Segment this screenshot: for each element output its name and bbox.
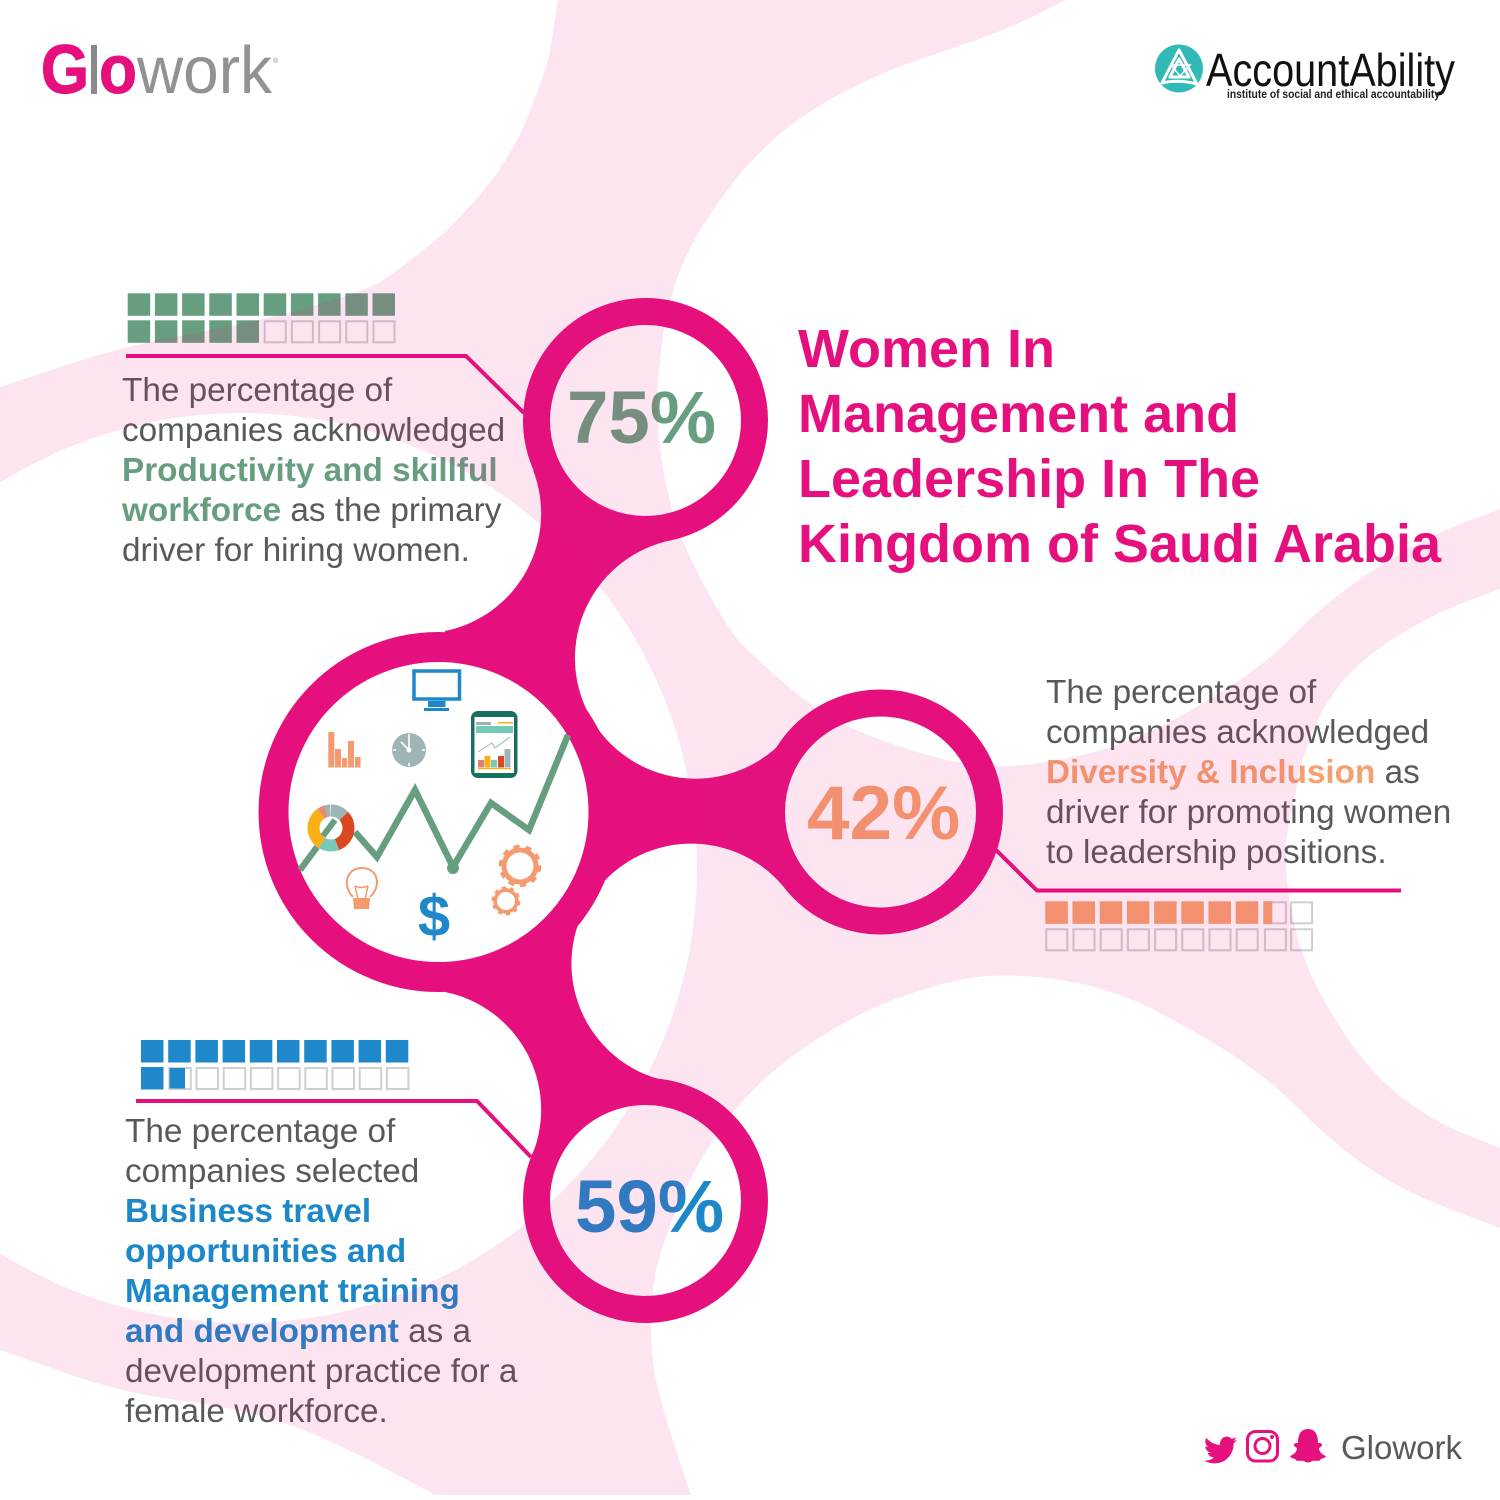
percentage: 42%: 42%: [807, 771, 960, 856]
icon: twitter: [1204, 1437, 1237, 1463]
text block: 42% description: driver for promoting women: [1046, 794, 1451, 831]
title: Leadership In The: [798, 449, 1260, 509]
percentage: 75%: 75%: [567, 376, 716, 459]
icon: dollar sign: $: [418, 884, 450, 949]
text block: 75% description: as the primary: [281, 492, 502, 529]
icon: donut chart: [314, 810, 348, 846]
ring: 59% circle: [536, 1092, 754, 1310]
waffle: 75% (15 of 20 squares): [128, 293, 395, 343]
title: Women In: [798, 319, 1055, 379]
text block: 59% description: companies selected: [125, 1153, 419, 1190]
text block: 75% description: workforce: [121, 492, 281, 529]
text block: 59% description: and development: [125, 1313, 399, 1350]
ring: 75% circle: [536, 312, 754, 530]
icon: gears: [493, 846, 540, 914]
text block: 42% description: as: [1375, 754, 1420, 791]
icon: instagram: [1248, 1432, 1278, 1461]
logo: AccountAbility: AccountAbility: [1206, 44, 1455, 96]
logo: AccountAbility: institute of social and ethical accountability: [1227, 87, 1440, 101]
text block: 75% description: companies acknowledged: [122, 412, 505, 449]
text block: 42% description: companies acknowledged: [1046, 714, 1429, 751]
icon: snapchat: [1290, 1429, 1326, 1462]
callout leader: 59%: [136, 1101, 531, 1157]
waffle: 59% (11.8 of 20 squares): [141, 1040, 408, 1090]
text block: 59% description: as a: [399, 1313, 471, 1350]
text block: 59% description: Business travel: [125, 1193, 371, 1230]
logo: Glowork: G: [41, 31, 89, 108]
logo: Glowork: ®: [273, 57, 279, 65]
footer social row: [1204, 1429, 1463, 1466]
central hub circle: [274, 647, 604, 977]
callout leader: 42%: [996, 850, 1401, 890]
line chart: [300, 735, 568, 874]
magenta connector hub: [445, 470, 783, 1153]
text block: 75% description: Productivity and skillful: [122, 452, 498, 489]
text block: 75% description: The percentage of: [122, 372, 393, 409]
footer handle: Glowork: [1341, 1429, 1463, 1466]
icon: light bulb: [347, 868, 377, 909]
text block: 59% description: development practice for a: [125, 1353, 518, 1390]
text block: 59% description: The percentage of: [125, 1113, 396, 1150]
waffle: 42% (8.4 of 20 squares): [1045, 901, 1312, 950]
text block: 42% description: Diversity & Inclusion: [1046, 754, 1375, 791]
logo: Glowork: [41, 31, 279, 108]
central icon cluster: [300, 671, 568, 949]
text block: 75% description: driver for hiring women.: [122, 532, 470, 569]
logo: AccountAbility: [1155, 44, 1455, 101]
ring: 42% circle: [772, 703, 990, 921]
icon: clock: [392, 733, 426, 767]
text block: 42% description: to leadership positions.: [1046, 834, 1387, 871]
percentage: 59%: 59%: [575, 1165, 724, 1248]
logo: Glowork: o: [99, 31, 137, 108]
text block: 59% description: opportunities and: [125, 1233, 406, 1270]
title: Management and: [798, 384, 1239, 444]
text block: 59% description: Management training: [125, 1273, 460, 1310]
text block: 59% description: female workforce.: [125, 1393, 388, 1430]
logo: Glowork: work: [136, 33, 272, 108]
callout leader: 75%: [126, 356, 524, 413]
title: Kingdom of Saudi Arabia: [798, 514, 1442, 574]
icon: monitor: [414, 671, 460, 711]
icon: bar chart: [328, 732, 360, 768]
icon: tablet: [471, 711, 518, 778]
text block: 42% description: The percentage of: [1046, 674, 1317, 711]
